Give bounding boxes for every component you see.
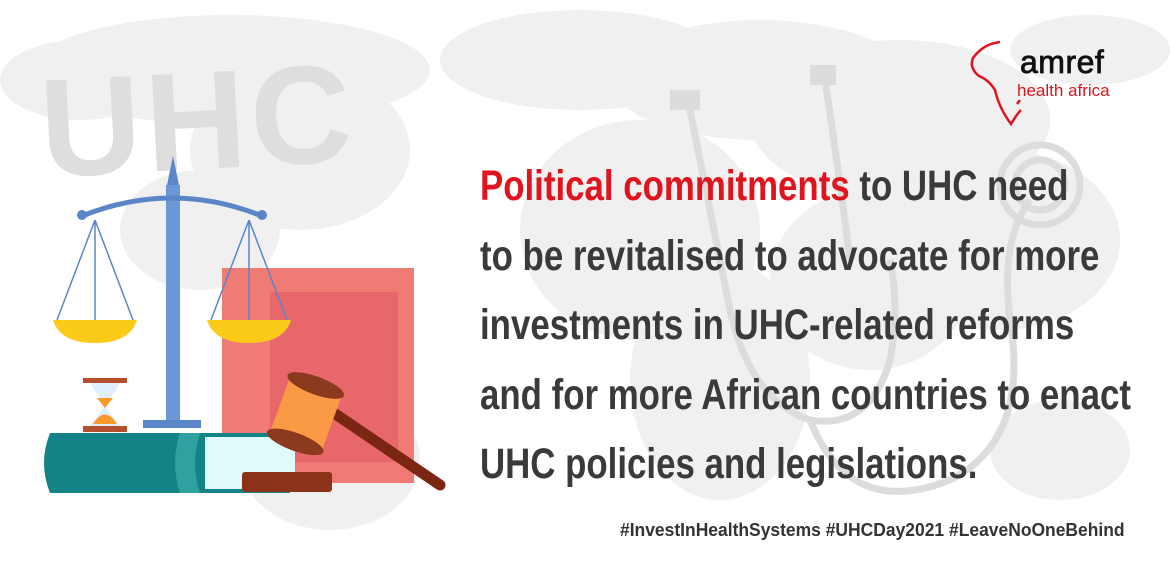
hourglass: [83, 378, 127, 432]
main message: Political commitments to UHC need: [480, 162, 1068, 210]
main message: [480, 162, 1131, 488]
gavel: [242, 367, 440, 492]
logo: amref health africa: amref: [1020, 44, 1104, 80]
logo: amref health africa: health africa: [1017, 81, 1110, 100]
logo: amref health africa: [970, 40, 1110, 126]
book: [44, 433, 295, 493]
main message: UHC policies and legislations.: [480, 440, 977, 488]
illustration: justice scale, book, gavel: [44, 156, 446, 493]
hashtags: #InvestInHealthSystems #UHCDay2021 #LeaveNoOneBehind: [620, 520, 1125, 540]
UHC background letters: UHC: [36, 34, 359, 207]
icon: Africa outline: [970, 40, 1022, 126]
main message: to be revitalised to advocate for more: [480, 232, 1099, 280]
main message: investments in UHC-related reforms: [480, 301, 1074, 349]
scale: [53, 156, 291, 428]
main message: and for more African countries to enact: [480, 370, 1131, 418]
stethoscope (faint): [670, 65, 1084, 495]
red document: [222, 268, 414, 483]
